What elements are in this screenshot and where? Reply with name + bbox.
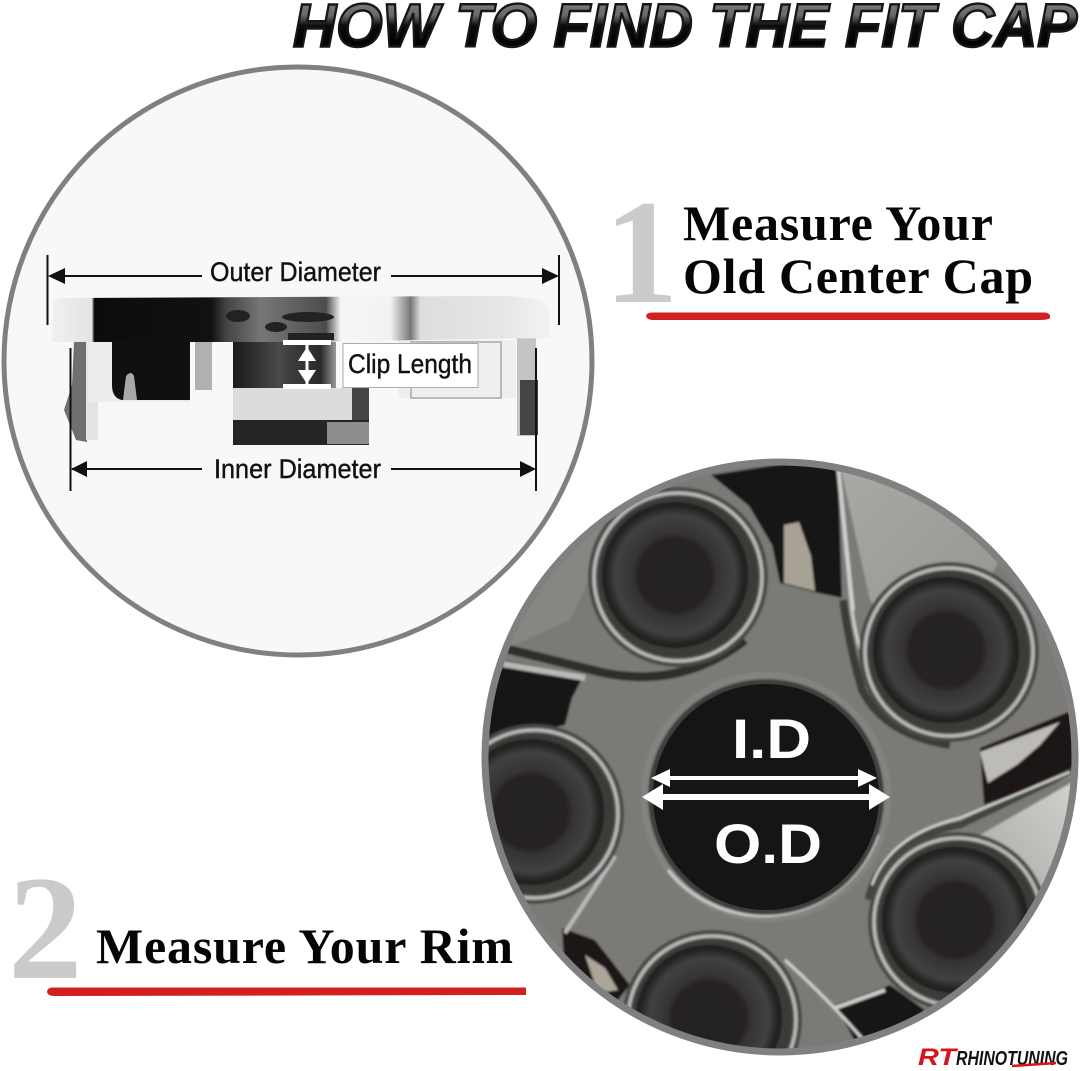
dimension: inner diameter: [70, 348, 536, 491]
label: I.D: I.D: [732, 707, 811, 770]
panel: wheel rim circle: [444, 455, 1080, 1071]
label: outer diameter: Outer Diameter: [210, 257, 381, 287]
step 2 heading: Measure Your Rim: [96, 918, 513, 974]
step 1 heading: [683, 195, 1033, 304]
circle background: [4, 67, 592, 655]
dark window: bottom right: [835, 984, 926, 1039]
photo: center cap side view: [52, 296, 550, 445]
dark window: right: [979, 711, 1072, 806]
label: O.D: O.D: [714, 812, 822, 875]
logo: RT Rhino Tuning: [918, 1044, 1068, 1071]
step 1 heading: Measure Your: [683, 195, 993, 251]
dimension: outer diameter: [48, 255, 559, 325]
circle border: [485, 462, 1075, 1052]
step 1 number: 1: [604, 170, 678, 335]
logo: RT Rhino Tuning: RT: [918, 1044, 959, 1071]
label: clip length: Clip Length: [348, 349, 472, 379]
arrow: I.D: [651, 769, 877, 787]
panel: old center cap circle: [4, 67, 592, 655]
step 1 red underline: [646, 312, 1050, 320]
label: inner diameter: Inner Diameter: [214, 454, 381, 484]
dark window: bottom left: [562, 928, 630, 1010]
dark window: top: [711, 462, 842, 598]
step 1 heading: Old Center Cap: [683, 248, 1033, 304]
step 2 red underline: [47, 988, 526, 996]
arrow: O.D: [642, 784, 890, 810]
lug hole: left: [488, 722, 625, 905]
step 2 number: 2: [8, 846, 82, 1011]
center cap recess: [653, 684, 879, 910]
lug hole: lower right: [868, 832, 1048, 1012]
dimension: clip length: [283, 340, 478, 389]
cap flange reflections: [226, 310, 334, 340]
lug swoosh outlines: [503, 640, 745, 677]
lug hole: top right: [859, 562, 1039, 742]
photo: wheel rim: [488, 466, 1072, 1048]
dark window: left: [489, 660, 582, 738]
lug hole: bottom: [623, 929, 803, 1048]
lug hole: top left: [588, 487, 768, 667]
